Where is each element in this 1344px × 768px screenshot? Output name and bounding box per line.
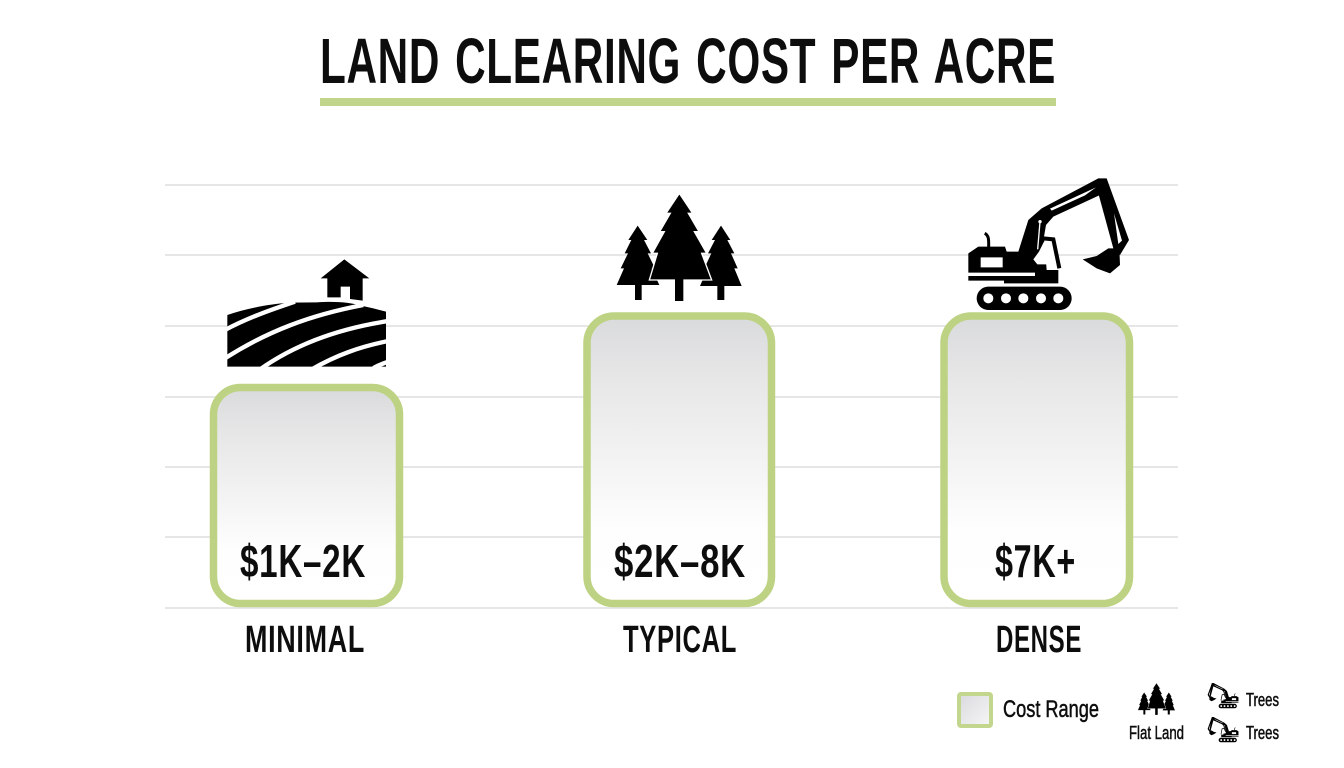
legend: trees label 1: Trees [1246, 690, 1279, 710]
panel: typical [587, 193, 772, 661]
icon: farmland with house [225, 259, 388, 369]
icon: pine trees [617, 193, 742, 301]
legend: cost range label: Cost Range [1003, 696, 1099, 723]
title [320, 25, 1056, 106]
legend: tree icon [1138, 683, 1175, 715]
value: minimal: $1K–2K [240, 535, 366, 587]
panel: minimal [214, 259, 400, 661]
label: typical: TYPICAL [623, 619, 737, 661]
value: dense: $7K+ [995, 535, 1076, 587]
icon: excavator [968, 178, 1129, 310]
bar: dense range [944, 316, 1130, 604]
legend: excavator icon 2 [1208, 717, 1238, 742]
label: dense: DENSE [996, 619, 1082, 661]
legend [959, 683, 1279, 743]
chart gridlines [165, 185, 1178, 608]
panel: dense [944, 178, 1130, 661]
legend: cost range swatch [959, 694, 991, 726]
legend: excavator icon 1 [1208, 683, 1238, 708]
bar: typical range [587, 316, 772, 604]
label: minimal: MINIMAL [245, 619, 365, 661]
legend: flat land label: Flat Land [1129, 723, 1184, 743]
legend: trees label 2: Trees [1246, 723, 1279, 743]
bar: minimal range [214, 388, 400, 604]
value: typical: $2K–8K [614, 535, 746, 587]
